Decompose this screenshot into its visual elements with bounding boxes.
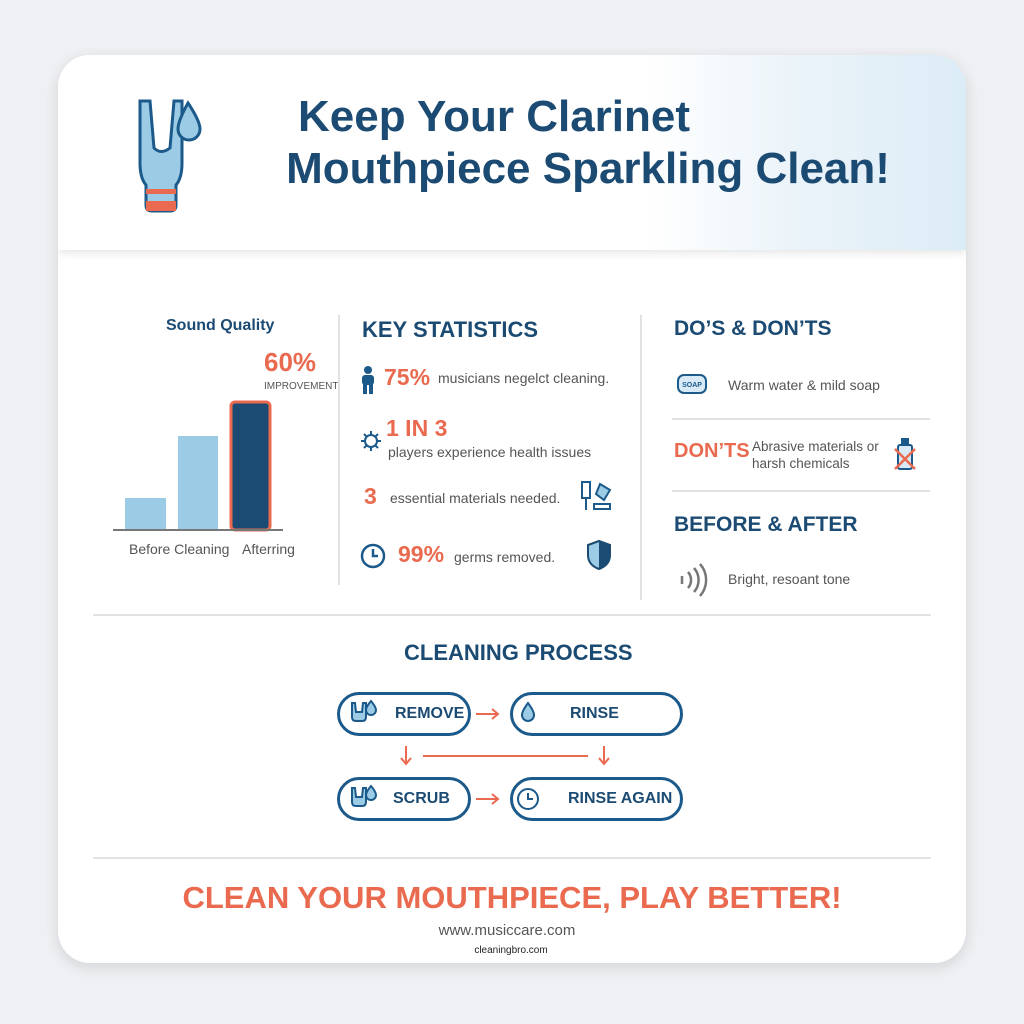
panel: dos and donts [672, 317, 930, 597]
stat 3 [364, 481, 612, 510]
stat 75%: 75% [384, 364, 430, 390]
panel: sound quality chart: Before Cleaning [129, 541, 229, 557]
title: Mouthpiece Sparkling Clean! [286, 144, 890, 193]
step rinse again [510, 777, 683, 821]
stat 99%: 99% [398, 541, 444, 567]
panel: sound quality chart: Afterring [242, 541, 295, 557]
before after item [680, 563, 850, 597]
panel: sound quality chart: 60% [264, 347, 316, 377]
card [58, 55, 966, 963]
footer slogan: CLEAN YOUR MOUTHPIECE, PLAY BETTER! [182, 880, 842, 915]
panel: sound quality chart: Sound Quality [166, 317, 274, 334]
step rinse: RINSE [570, 705, 619, 722]
do item: SOAP [682, 382, 702, 389]
step scrub [337, 777, 471, 821]
dont item: DON’TS [674, 440, 750, 462]
dont item: harsh chemicals [752, 456, 850, 471]
dont item [674, 438, 916, 471]
step rinse [510, 692, 683, 736]
step remove: REMOVE [395, 705, 464, 722]
do item: Warm water & mild soap [728, 377, 880, 393]
stat 75%: musicians negelct cleaning. [438, 370, 609, 386]
step scrub: SCRUB [393, 790, 450, 807]
stat 99% [360, 540, 611, 570]
panel: cleaning process: CLEANING PROCESS [404, 640, 633, 665]
dont item: Abrasive materials or [752, 439, 879, 454]
footer url: www.musiccare.com [439, 922, 575, 939]
stat 3: 3 [364, 483, 377, 509]
panel: sound quality chart [113, 317, 338, 557]
panel: cleaning process [337, 640, 683, 821]
panel: key statistics: KEY STATISTICS [362, 317, 538, 342]
card: cleaningbro.com [474, 945, 548, 956]
before after item: Bright, resoant tone [728, 571, 850, 587]
panel: dos and donts: DO’S & DON’TS [674, 317, 832, 340]
step remove [337, 692, 471, 736]
header [58, 55, 966, 250]
do item [677, 374, 880, 394]
stat 75% [362, 364, 609, 394]
stat 3: essential materials needed. [390, 490, 560, 506]
title [286, 92, 890, 193]
icon: mouthpiece with drop [138, 100, 202, 212]
stat 1 in 3 [361, 415, 591, 460]
title: Keep Your Clarinet [298, 92, 690, 141]
stat 99%: germs removed. [454, 549, 555, 565]
panel: dos and donts: BEFORE & AFTER [674, 513, 858, 536]
step rinse again: RINSE AGAIN [568, 790, 672, 807]
panel: key statistics [360, 317, 612, 570]
arrows [351, 700, 610, 810]
bar chart [113, 400, 283, 532]
panel: sound quality chart: IMPROVEMENT [264, 381, 338, 392]
stat 1 in 3: 1 IN 3 [386, 415, 447, 441]
stat 1 in 3: players experience health issues [388, 444, 591, 460]
